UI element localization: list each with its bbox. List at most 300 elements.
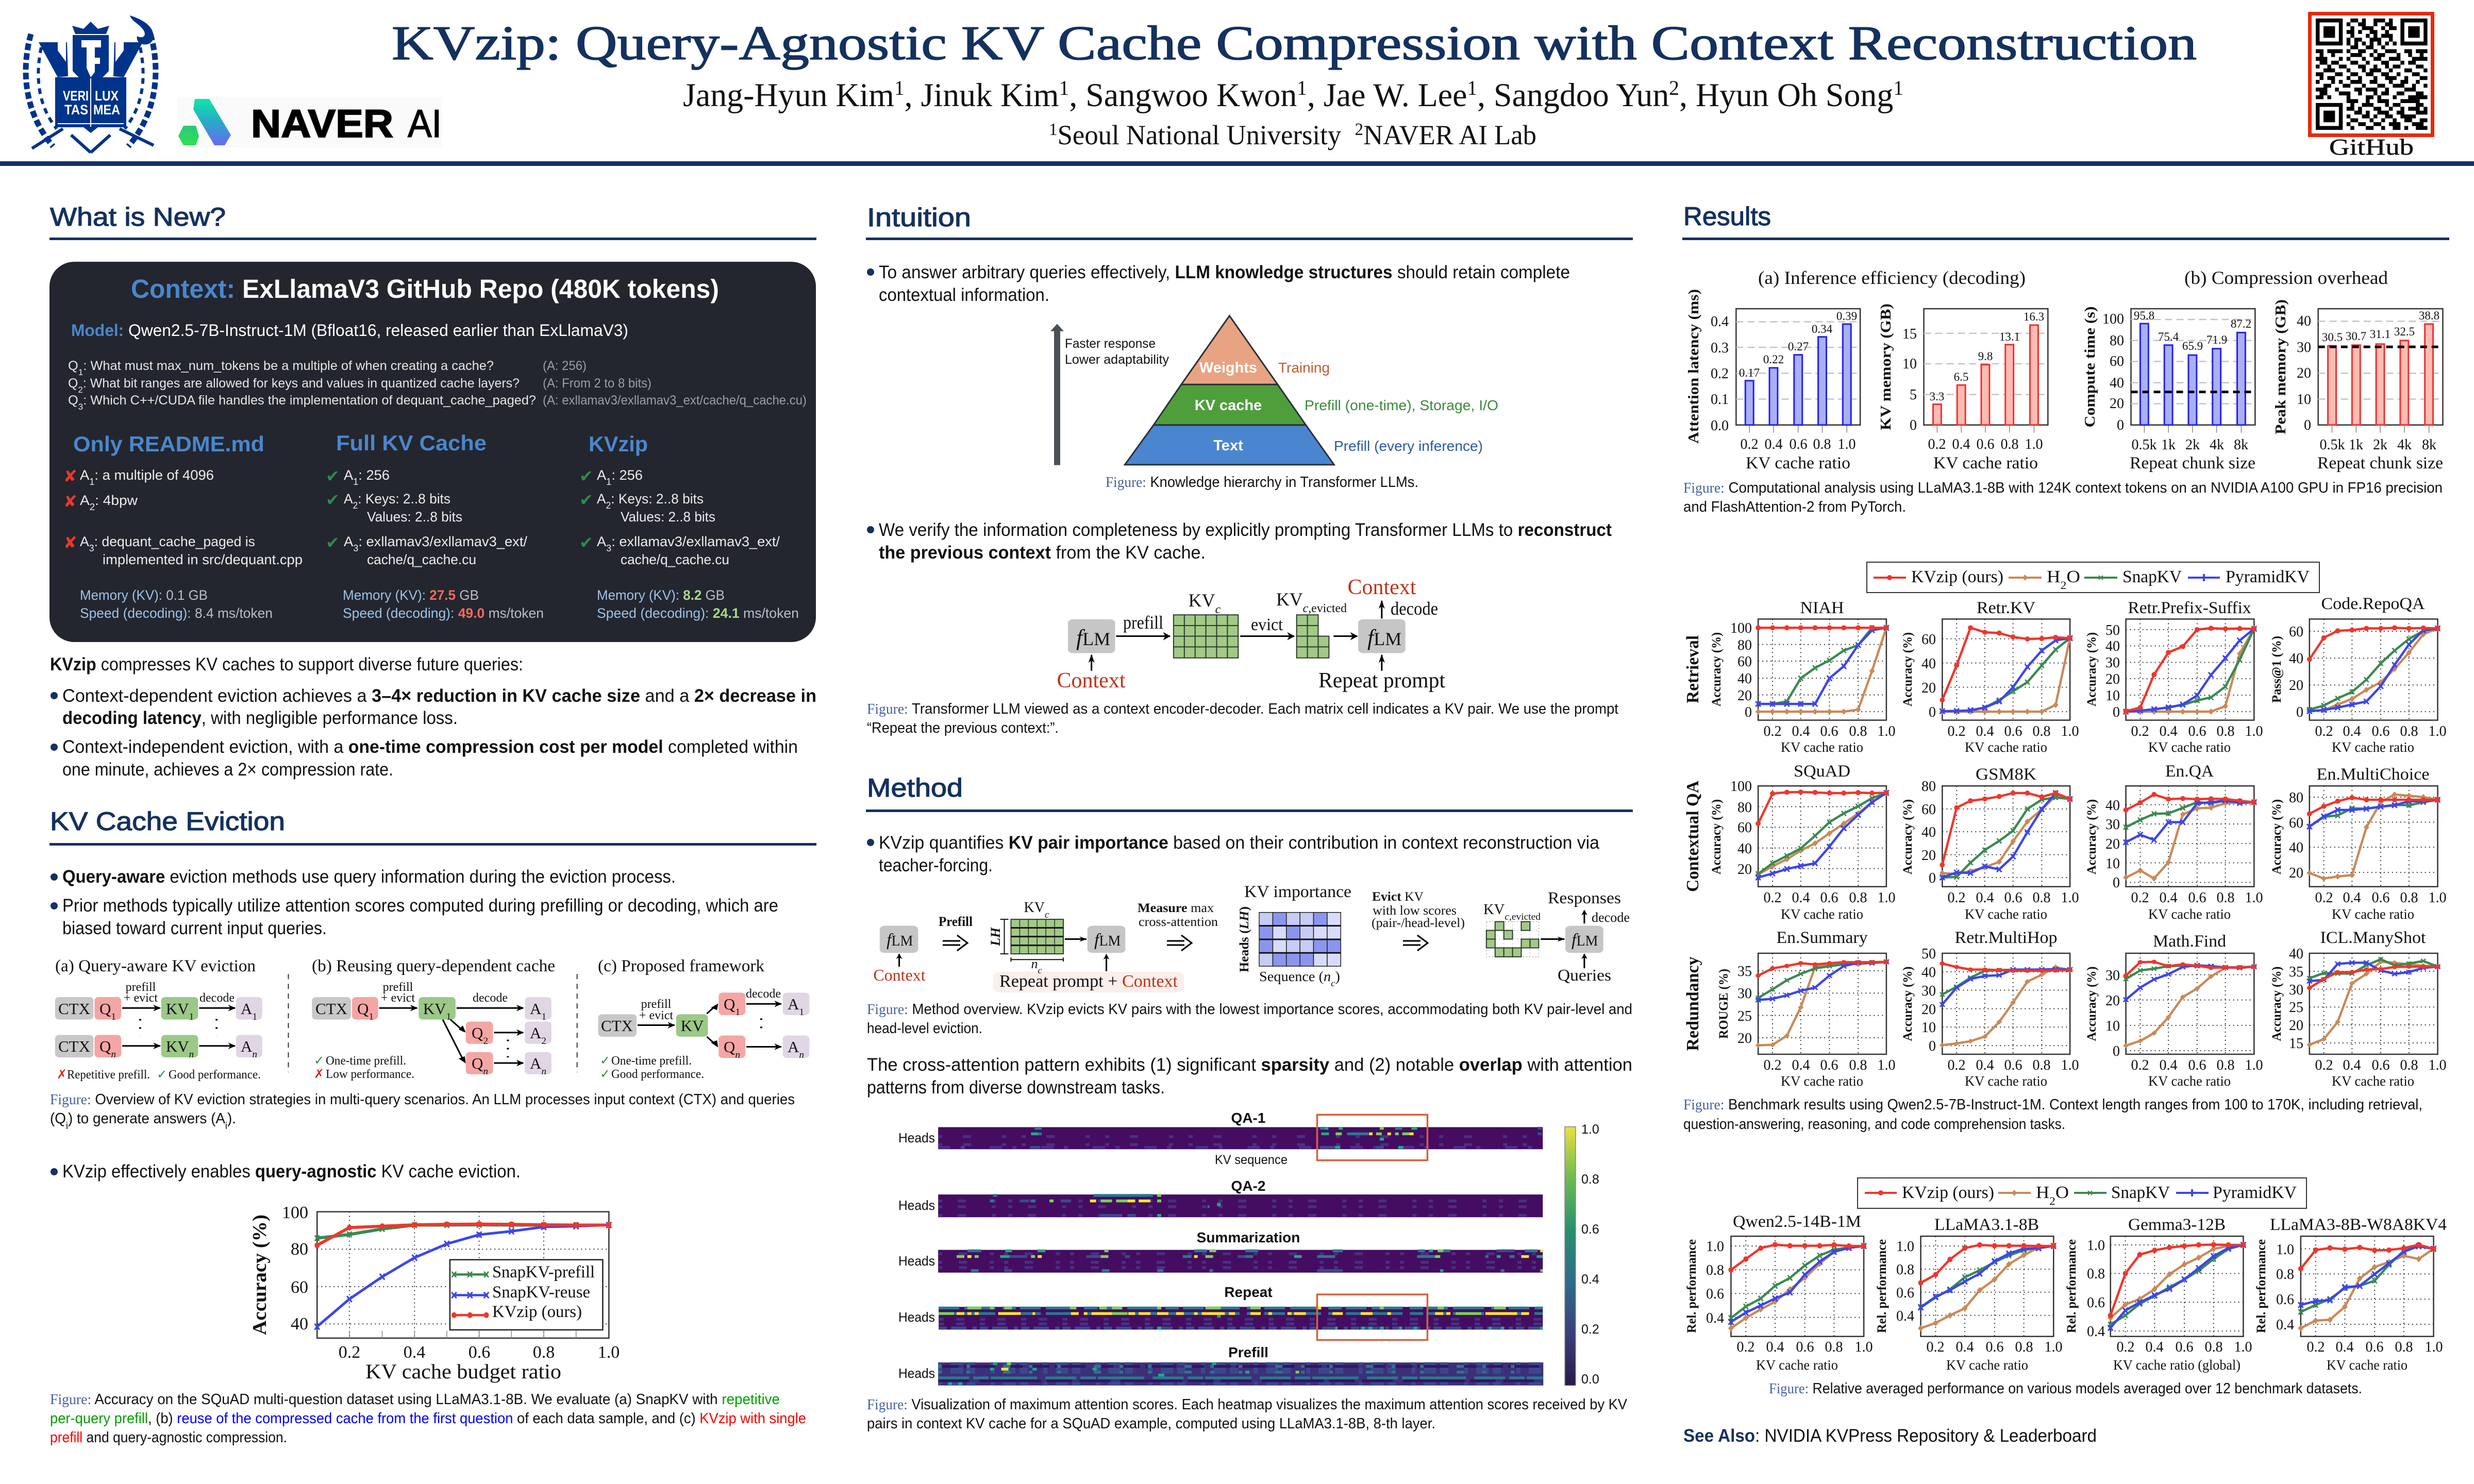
chart: SQuAD: 0.8	[1849, 890, 1867, 906]
chart: En.MultiChoice: 0.6	[2372, 890, 2389, 906]
chart: Retr.MultiHop: Accuracy (%)	[1901, 967, 1915, 1041]
chart: LLaMA3-8B-W8A8KV4	[2254, 1216, 2447, 1373]
chart: Retr.KV: Accuracy (%)	[1901, 632, 1915, 706]
diagram: method overview: KVc,evicted	[1483, 902, 1541, 922]
chart: ICL.ManyShot: KV cache ratio	[2332, 1073, 2414, 1089]
chart: Math.Find: 0.4	[2160, 1057, 2177, 1073]
chart: Retr.Prefix-Suffix: 50	[2105, 622, 2120, 638]
chart: Code.RepoQA: 0	[2296, 704, 2303, 720]
chart: Qwen2.5-14B-1M: 0.6	[1796, 1339, 1814, 1355]
chart: Retr.KV: KV cache ratio	[1965, 739, 2047, 755]
chart: En.QA: KV cache ratio	[2148, 906, 2231, 922]
chart: Retr.MultiHop	[1901, 929, 2079, 1089]
chart: En.MultiChoice: 20	[2289, 865, 2303, 881]
bar charts: computational analysis: KV cache ratio	[1746, 454, 1850, 473]
chart: En.QA: 30	[2105, 817, 2120, 833]
line chart: accuracy vs KV cache budget ratio: 60	[291, 1278, 308, 1297]
text block: KVzip summary: KVzip compresses KV caches to support diverse future queries:	[50, 654, 523, 674]
heatmaps: maximum attention scores: 0.6	[1581, 1222, 1599, 1237]
caption: method overview: Figure: Method overview. KVzip evicts KV pairs with the lowest importance scores, accommodating both KV pair-level and	[867, 1001, 1632, 1018]
diagram: knowledge hierarchy pyramid: Lower adaptability	[1065, 352, 1169, 367]
bar charts: computational analysis: 0.8	[1813, 436, 1831, 452]
bar charts: computational analysis: 100	[2102, 311, 2124, 327]
bullet: KV pair importance: teacher-forcing.	[879, 855, 993, 875]
bar charts: computational analysis: 0.34	[1812, 323, 1833, 335]
heatmaps: maximum attention scores: KV sequence	[1215, 1153, 1288, 1167]
chart: ICL.ManyShot: 0.4	[2343, 1057, 2361, 1073]
bar charts: computational analysis: 0.4	[1711, 314, 1729, 330]
chart: Retr.MultiHop: 1.0	[2061, 1057, 2079, 1073]
chart: Retr.MultiHop: 0.2	[1947, 1057, 1966, 1073]
chart: En.QA: 0.4	[2160, 890, 2177, 906]
chart: En.Summary	[1717, 929, 1896, 1089]
chart: En.Summary: 0.8	[1849, 1057, 1867, 1073]
bar charts: computational analysis: 0.27	[1788, 340, 1809, 353]
bar charts: computational analysis: 0.5k	[2132, 437, 2157, 453]
bar charts: computational analysis: 20	[2297, 365, 2311, 381]
chart: SQuAD: 0.2	[1764, 890, 1781, 906]
chart: En.QA: 0.8	[2216, 890, 2235, 906]
chart: En.MultiChoice: 1.0	[2429, 890, 2446, 906]
chart: Math.Find: 30	[2105, 968, 2120, 984]
diagram: method overview: KVc	[1024, 900, 1049, 920]
diagram: eviction strategies: (c) Proposed framework	[598, 957, 765, 975]
diagram: eviction strategies: ✗	[57, 1067, 67, 1082]
bar charts: computational analysis: (a) Inference efficiency (decoding)	[1758, 267, 2026, 288]
bar charts: computational analysis: 0.4	[1952, 436, 1970, 452]
diagram: eviction strategies: An	[241, 1037, 257, 1059]
diagram: eviction strategies: prefill	[641, 998, 672, 1011]
chart: Gemma3-12B: Gemma3-12B	[2128, 1216, 2226, 1234]
caption: computational analysis: Figure: Computational analysis using LLaMA3.1-8B with 124K context tokens on an NVIDIA A100 GPU in FP16 precision	[1683, 480, 2443, 496]
diagram: method overview: Heads (LH)	[1238, 906, 1251, 972]
chart: Retr.KV: 40	[1921, 656, 1936, 672]
chart: ICL.ManyShot: 25	[2289, 1000, 2303, 1016]
heatmaps: maximum attention scores: Heads	[898, 1309, 935, 1325]
chart: Code.RepoQA: Pass@1 (%)	[2270, 636, 2284, 703]
QR label: GitHub	[2329, 134, 2414, 160]
bar charts: computational analysis: 30.7	[2346, 330, 2366, 343]
chart: En.MultiChoice: 0.8	[2400, 890, 2418, 906]
chart: Math.Find	[2085, 932, 2263, 1089]
line chart: accuracy vs KV cache budget ratio: 100	[282, 1203, 308, 1222]
diagram: eviction strategies: + evict	[639, 1009, 673, 1022]
bar charts: computational analysis: 9.8	[1978, 350, 1993, 363]
chart: LLaMA3.1-8B: KV cache ratio	[1946, 1357, 2028, 1373]
dark context panel: A2: Keys: 2..8 bits	[344, 491, 450, 511]
diagram: method overview: LH	[988, 927, 1003, 947]
diagram: context encoder-decoder: evict	[1251, 615, 1283, 634]
diagram: knowledge hierarchy pyramid	[1050, 316, 1498, 465]
chart: En.MultiChoice: En.MultiChoice	[2316, 765, 2430, 784]
heatmaps: maximum attention scores: 0.2	[1581, 1322, 1599, 1337]
bar charts: computational analysis: KV memory (GB)	[1878, 303, 1894, 430]
chart: En.Summary: 0.4	[1792, 1057, 1810, 1073]
chart: Retr.MultiHop: 0	[1929, 1038, 1936, 1054]
bar charts: computational analysis: 32.5	[2394, 325, 2415, 338]
heatmaps: maximum attention scores: 1.0	[1581, 1122, 1599, 1137]
diagram: eviction strategies: ✗	[314, 1067, 324, 1081]
chart: Gemma3-12B: 0.8	[2087, 1266, 2105, 1282]
chart: En.QA: 40	[2105, 798, 2120, 814]
diagram: eviction strategies: ✓	[314, 1053, 324, 1068]
diagram: knowledge hierarchy pyramid: Weights	[1199, 360, 1257, 376]
bullet: knowledge structures	[867, 262, 1570, 305]
dark context panel: ✔	[326, 466, 340, 486]
chart: Gemma3-12B: 0.4	[2145, 1339, 2164, 1355]
bar charts: computational analysis: Attention latency (ms)	[1686, 289, 1702, 444]
diagram: eviction strategies: Q1	[99, 1000, 116, 1022]
chart: Retr.Prefix-Suffix: 30	[2105, 655, 2120, 671]
chart: NIAH: KV cache ratio	[1781, 739, 1863, 755]
chart: GSM8K	[1901, 765, 2079, 922]
diagram: method overview: decode	[1592, 910, 1630, 925]
chart: En.MultiChoice: 0.2	[2315, 890, 2333, 906]
bar charts: computational analysis: 0.22	[1763, 353, 1784, 366]
caption: benchmark results: Figure: Benchmark results using Qwen2.5-7B-Instruct-1M. Context length ranges from 100 to 170K, including retrieval,	[1683, 1097, 2422, 1113]
chart: GSM8K: 20	[1921, 848, 1936, 864]
bar charts: computational analysis: 0.6	[1790, 436, 1807, 452]
diagram: eviction strategies: KVn	[166, 1037, 194, 1059]
bar charts: computational analysis: 0.2	[1740, 436, 1759, 452]
bullet: query-agnostic: KVzip effectively enables query-agnostic KV cache eviction.	[62, 1161, 521, 1182]
chart: Qwen2.5-14B-1M: 0.4	[1766, 1339, 1784, 1355]
bar charts: computational analysis: 0.5k	[2319, 437, 2345, 453]
chart: Gemma3-12B: 1.0	[2087, 1238, 2105, 1254]
chart: Gemma3-12B: 0.2	[2116, 1339, 2135, 1355]
chart: En.MultiChoice: KV cache ratio	[2332, 906, 2414, 922]
dark context panel: A1: 256	[597, 467, 643, 487]
chart: NIAH: 60	[1737, 654, 1752, 670]
chart: SQuAD: 100	[1730, 779, 1752, 795]
caption: computational analysis	[1683, 480, 2443, 515]
diagram: context encoder-decoder: Repeat prompt	[1318, 669, 1445, 693]
chart: Code.RepoQA: KV cache ratio	[2332, 739, 2414, 755]
legend: benchmark methods: H2O	[2047, 567, 2080, 592]
line chart: accuracy vs KV cache budget ratio: 0.4	[404, 1343, 425, 1362]
chart: Retr.MultiHop: 50	[1921, 946, 1936, 962]
chart: SQuAD: 80	[1737, 800, 1752, 816]
chart: Retr.MultiHop: 0.8	[2033, 1057, 2050, 1073]
chart: NIAH: 80	[1737, 637, 1752, 653]
heatmaps: maximum attention scores: QA-1	[1231, 1110, 1265, 1126]
chart: LLaMA3-8B-W8A8KV4: 0.2	[2307, 1339, 2325, 1355]
diagram: eviction strategies: CTX	[315, 1000, 347, 1018]
chart: ICL.ManyShot: 20	[2289, 1018, 2303, 1034]
bar charts: computational analysis: 1k	[2349, 437, 2363, 453]
chart: ICL.ManyShot: 40	[2289, 946, 2303, 962]
dark context panel: Q3: Which C++/CUDA file handles the implementation of dequant_cache_paged?	[68, 393, 536, 411]
diagram: eviction strategies: (a) Query-aware KV eviction	[55, 957, 256, 975]
chart: SQuAD: 0.4	[1792, 890, 1810, 906]
chart: GSM8K: 80	[1921, 779, 1936, 795]
bar charts: computational analysis: 0.17	[1739, 366, 1760, 379]
chart: En.Summary: KV cache ratio	[1781, 1073, 1863, 1089]
row label: Contextual QA: Contextual QA	[1683, 781, 1702, 892]
chart: SQuAD: SQuAD	[1794, 762, 1850, 781]
bar charts: computational analysis: 3.3	[1930, 390, 1944, 403]
diagram: eviction strategies: decode	[473, 991, 508, 1005]
diagram: method overview: fLM	[1572, 931, 1598, 950]
text block: eviction bullets: Query-aware eviction methods use query information during the eviction process.	[62, 867, 676, 887]
chart: LLaMA3.1-8B: LLaMA3.1-8B	[1934, 1216, 2039, 1234]
chart: Code.RepoQA: 0.2	[2315, 723, 2333, 739]
chart: GSM8K: 60	[1921, 802, 1936, 818]
chart: LLaMA3.1-8B: 1.0	[2044, 1339, 2063, 1355]
caption: method overview	[867, 1001, 1632, 1037]
bar charts: computational analysis: 13.1	[1999, 330, 2020, 343]
diagram: method overview: Queries	[1558, 966, 1611, 984]
line chart: accuracy vs KV cache budget ratio: KV cache budget ratio	[365, 1360, 561, 1383]
chart: Math.Find: 20	[2105, 993, 2120, 1009]
diagram: eviction strategies: CTX	[58, 1000, 90, 1018]
chart: ICL.ManyShot: 0.6	[2372, 1057, 2389, 1073]
heatmaps: maximum attention scores: 0.8	[1581, 1172, 1599, 1187]
text block: eviction bullets	[51, 867, 778, 938]
chart: Qwen2.5-14B-1M: KV cache ratio	[1756, 1357, 1838, 1373]
line chart: accuracy vs KV cache budget ratio: 40	[291, 1314, 308, 1334]
bar charts: computational analysis: 10	[1902, 356, 1917, 372]
dark context panel: Speed (decoding): 24.1 ms/token	[597, 605, 799, 621]
bar charts: computational analysis: 0.1	[1711, 392, 1729, 408]
caption: accuracy chart	[50, 1391, 806, 1446]
dark context panel: (A: 256)	[543, 359, 587, 373]
chart: Retr.Prefix-Suffix: 1.0	[2245, 723, 2263, 739]
chart: En.QA: 1.0	[2245, 890, 2263, 906]
diagram: knowledge hierarchy pyramid: Faster response	[1065, 336, 1156, 351]
chart: Math.Find: 1.0	[2245, 1057, 2263, 1073]
bar charts: computational analysis: Repeat chunk size	[2317, 454, 2443, 473]
chart: Gemma3-12B: 0.8	[2205, 1339, 2222, 1355]
diagram: eviction strategies: Good performance.	[169, 1068, 261, 1082]
chart: En.MultiChoice: Accuracy (%)	[2270, 799, 2284, 874]
bar charts: computational analysis: 0.39	[1836, 310, 1857, 323]
chart: SQuAD: 20	[1737, 862, 1752, 878]
chart: En.Summary: En.Summary	[1776, 929, 1868, 947]
dark context panel: A2: 4bpw	[80, 493, 138, 512]
line chart: accuracy vs KV cache budget ratio: SnapKV-reuse	[492, 1283, 590, 1302]
diagram: method overview: Responses	[1548, 888, 1621, 907]
chart: NIAH: 0.4	[1792, 723, 1810, 739]
chart: NIAH: 40	[1737, 671, 1752, 687]
chart: En.QA: En.QA	[2165, 762, 2214, 781]
chart: NIAH: 0.6	[1820, 723, 1838, 739]
caption: accuracy chart: prefill and query-agnostic compression.	[50, 1429, 287, 1446]
bar charts: computational analysis: 0.4	[1765, 436, 1782, 452]
chart: Gemma3-12B: 1.0	[2234, 1339, 2252, 1355]
legend: model comparison: SnapKV	[2111, 1183, 2170, 1202]
chart: Code.RepoQA: 1.0	[2429, 723, 2446, 739]
text block: KVzip summary	[50, 654, 816, 780]
chart: GSM8K: 0.8	[2033, 890, 2050, 906]
chart: Retr.Prefix-Suffix: 0.4	[2160, 723, 2177, 739]
chart: ICL.ManyShot: 15	[2289, 1036, 2303, 1052]
diagram: eviction strategies: Q1	[724, 995, 740, 1017]
diagram: eviction strategies: Qn	[724, 1038, 740, 1060]
bar charts: computational analysis: (b) Compression overhead	[2184, 267, 2388, 288]
chart: SQuAD: 1.0	[1877, 890, 1896, 906]
diagram: eviction strategies: Good performance.	[611, 1068, 704, 1081]
chart: En.QA: 0	[2113, 875, 2120, 891]
chart: LLaMA3-8B-W8A8KV4: 1.0	[2425, 1339, 2443, 1355]
dark context panel: Memory (KV): 8.2 GB	[597, 587, 725, 603]
caption: method overview: head-level eviction.	[867, 1020, 982, 1037]
bar charts: computational analysis: 0.2	[1711, 366, 1729, 382]
chart: LLaMA3.1-8B: Rel. performance	[1875, 1239, 1889, 1333]
line chart: accuracy vs KV cache budget ratio: SnapKV-prefill	[492, 1263, 595, 1281]
bar charts: computational analysis: 0.2	[1928, 436, 1946, 452]
chart: SQuAD: 0.6	[1820, 890, 1838, 906]
bar charts: computational analysis: 20	[2110, 396, 2124, 412]
caption: eviction strategies	[50, 1091, 795, 1132]
caption: accuracy chart: Figure: Accuracy on the SQuAD multi-question dataset using LLaMA3.1-8B. We evaluate (a) SnapKV with repetitive	[50, 1391, 780, 1408]
chart: Math.Find: KV cache ratio	[2148, 1073, 2231, 1089]
heading: What is New?	[50, 203, 226, 231]
dark context panel: implemented in src/dequant.cpp	[103, 552, 303, 567]
chart: LLaMA3.1-8B	[1875, 1216, 2063, 1373]
logo: Seoul National University emblem: TAS	[64, 102, 88, 117]
diagram: context encoder-decoder: decode	[1391, 598, 1438, 619]
bar charts: computational analysis: 38.8	[2419, 309, 2439, 322]
diagram: eviction strategies: CTX	[601, 1017, 633, 1035]
chart: NIAH: 100	[1730, 620, 1752, 636]
chart: LLaMA3-8B-W8A8KV4: 0.4	[2336, 1339, 2353, 1355]
logo: Seoul National University emblem: MEA	[93, 102, 120, 117]
chart: Math.Find: 0.6	[2188, 1057, 2206, 1073]
diagram: eviction strategies: (b) Reusing query-dependent cache	[312, 957, 555, 975]
chart: NIAH: 0	[1745, 704, 1752, 720]
caption: accuracy chart: per-query prefill, (b) reuse of the compressed cache from the first question of each data sample, and (c) KVzip with single	[50, 1410, 806, 1427]
dark context panel: ✔	[579, 490, 593, 510]
chart: GSM8K: 0.6	[2004, 890, 2022, 906]
diagram: eviction strategies: KV1	[166, 1000, 194, 1022]
chart: NIAH	[1710, 599, 1896, 755]
caption: heatmaps: Figure: Visualization of maximum attention scores. Each heatmap visualizes the maximum attention scores received by KV	[867, 1396, 1628, 1413]
dark context panel: A3: exllamav3/exllamav3_ext/	[344, 534, 527, 553]
chart: En.QA: 10	[2105, 856, 2120, 872]
chart: SQuAD: 60	[1737, 820, 1752, 836]
dark context panel: cache/q_cache.cu	[367, 552, 476, 567]
caption: hierarchy: Figure: Knowledge hierarchy in Transformer LLMs.	[1106, 474, 1418, 491]
dark context panel: Speed (decoding): 49.0 ms/token	[343, 605, 544, 621]
chart: Code.RepoQA: 20	[2289, 678, 2303, 694]
chart: LLaMA3.1-8B: 0.8	[2015, 1339, 2033, 1355]
line chart: accuracy vs KV cache budget ratio: 1.0	[598, 1343, 620, 1362]
bar charts: computational analysis: 6.5	[1954, 370, 1968, 383]
bar charts: computational analysis: Peak memory (GB)	[2273, 299, 2289, 434]
heatmaps: maximum attention scores: Heads	[898, 1365, 935, 1381]
diagram: eviction strategies: One-time prefill.	[611, 1054, 692, 1068]
chart: Code.RepoQA: 0.8	[2400, 723, 2418, 739]
bar charts: computational analysis: 5	[1910, 387, 1917, 403]
dark context panel: Memory (KV): 0.1 GB	[80, 587, 208, 603]
line chart: accuracy vs KV cache budget ratio: 80	[291, 1240, 308, 1259]
chart: LLaMA3-8B-W8A8KV4: LLaMA3-8B-W8A8KV4	[2270, 1216, 2447, 1234]
heatmaps: maximum attention scores: Heads	[898, 1198, 935, 1213]
diagram: method overview: KV importance	[1244, 883, 1351, 901]
line chart: accuracy vs KV cache budget ratio	[249, 1203, 620, 1383]
chart: En.Summary: 30	[1737, 986, 1752, 1002]
bullet: reconstruct: We verify the information completeness by explicitly prompting Transformer LLMs to reconstruct	[879, 520, 1612, 540]
diagram: eviction strategies: + evict	[381, 991, 415, 1005]
caption: benchmark results	[1683, 1097, 2422, 1133]
chart: Qwen2.5-14B-1M: Rel. performance	[1685, 1239, 1699, 1333]
caption: relative performance: Figure: Relative averaged performance on various models averaged over 12 benchmark datasets.	[1769, 1380, 2362, 1397]
bar charts: computational analysis: Repeat chunk size	[2130, 454, 2255, 473]
heatmaps: maximum attention scores: Repeat	[1224, 1284, 1273, 1300]
chart: GSM8K: 0.4	[1976, 890, 1994, 906]
diagram: method overview: Sequence (nc)	[1259, 969, 1340, 988]
heading: Intuition	[867, 203, 971, 232]
row label: Retrieval: Retrieval	[1683, 635, 1702, 703]
chart: En.QA: Accuracy (%)	[2085, 799, 2099, 874]
text block: eviction bullets: Prior methods typically utilize attention scores computed during prefilling or decoding, which are	[62, 896, 778, 916]
chart: Math.Find: 10	[2105, 1018, 2120, 1034]
dark context panel: (A: From 2 to 8 bits)	[543, 376, 651, 391]
chart: Qwen2.5-14B-1M: 0.8	[1706, 1262, 1724, 1278]
chart: En.Summary: 35	[1737, 964, 1752, 980]
text block: KVzip summary: decoding latency, with negligible performance loss.	[62, 708, 458, 728]
legend: model comparison: H2O	[2036, 1183, 2069, 1207]
chart: En.Summary: 0.6	[1820, 1057, 1838, 1073]
bar charts: computational analysis: 0.8	[2001, 436, 2018, 452]
panel: What is New?	[49, 203, 816, 780]
caption: heatmaps	[867, 1396, 1628, 1432]
bullet: knowledge structures: To answer arbitrary queries effectively, LLM knowledge structures should retain complete	[879, 262, 1570, 282]
chart: GSM8K: 40	[1921, 824, 1936, 840]
chart: En.Summary: 25	[1737, 1008, 1752, 1024]
caption: eviction strategies: (Qi) to generate answers (Ai).	[50, 1110, 236, 1132]
chart: GSM8K: 0	[1929, 870, 1936, 886]
bar charts: computational analysis: 40	[2297, 313, 2311, 329]
title: KVzip: Query-Agnostic KV Cache Compression with Context Reconstruction	[392, 16, 2197, 70]
caption: heatmaps: pairs in context KV cache for a SQuAD example, computed using LLaMA3.1-8B, 8-th layer.	[867, 1415, 1435, 1432]
chart: Retr.Prefix-Suffix: KV cache ratio	[2148, 739, 2231, 755]
chart: Code.RepoQA: 60	[2289, 624, 2303, 640]
bar charts: computational analysis: 16.3	[2024, 310, 2044, 323]
legend: benchmark methods: PyramidKV	[2226, 567, 2310, 586]
chart: NIAH: NIAH	[1800, 599, 1844, 617]
chart: LLaMA3-8B-W8A8KV4: 1.0	[2276, 1242, 2294, 1258]
diagram: eviction strategies: decode	[746, 987, 781, 1001]
panel: Results	[1682, 202, 2449, 1446]
chart: Retr.Prefix-Suffix: Retr.Prefix-Suffix	[2128, 599, 2251, 617]
chart: Retr.KV: 0.8	[2033, 723, 2050, 739]
bar charts: computational analysis: 0.3	[1711, 340, 1729, 356]
chart: Gemma3-12B: 0.4	[2087, 1324, 2105, 1340]
bar charts: computational analysis: 8k	[2234, 437, 2248, 453]
dark context panel: Q2: What bit ranges are allowed for keys and values in quantized cache layers?	[68, 376, 520, 395]
header band	[26, 13, 2433, 160]
chart: ICL.ManyShot: 0.8	[2400, 1057, 2418, 1073]
dark context panel: Full KV Cache	[336, 431, 487, 455]
chart: Retr.MultiHop: Retr.MultiHop	[1954, 929, 2058, 947]
chart: NIAH: 0.2	[1764, 723, 1781, 739]
diagram: method overview: with low scores	[1373, 904, 1457, 918]
chart: NIAH: 1.0	[1877, 723, 1896, 739]
chart: Math.Find: 0.2	[2131, 1057, 2149, 1073]
chart: Retr.MultiHop: 10	[1921, 1020, 1936, 1036]
bar charts: computational analysis: 4k	[2397, 437, 2412, 453]
chart: En.QA	[2085, 762, 2263, 922]
dark context panel: Only README.md	[73, 432, 264, 456]
caption: eviction strategies: Figure: Overview of KV eviction strategies in multi-query scenarios. An LLM processes input context (CTX) and queries	[50, 1091, 795, 1108]
caption: encoder-decoder: Figure: Transformer LLM viewed as a context encoder-decoder. Each matrix cell indicates a KV pair. We use the prompt	[867, 701, 1618, 717]
chart: Retr.MultiHop: 40	[1921, 965, 1936, 981]
text block: KVzip summary: Context-dependent eviction achieves a 3–4× reduction in KV cache size and a 2× decrease in	[62, 686, 816, 706]
dark context panel: ✔	[326, 533, 340, 552]
bar charts: computational analysis: 2k	[2373, 437, 2387, 453]
